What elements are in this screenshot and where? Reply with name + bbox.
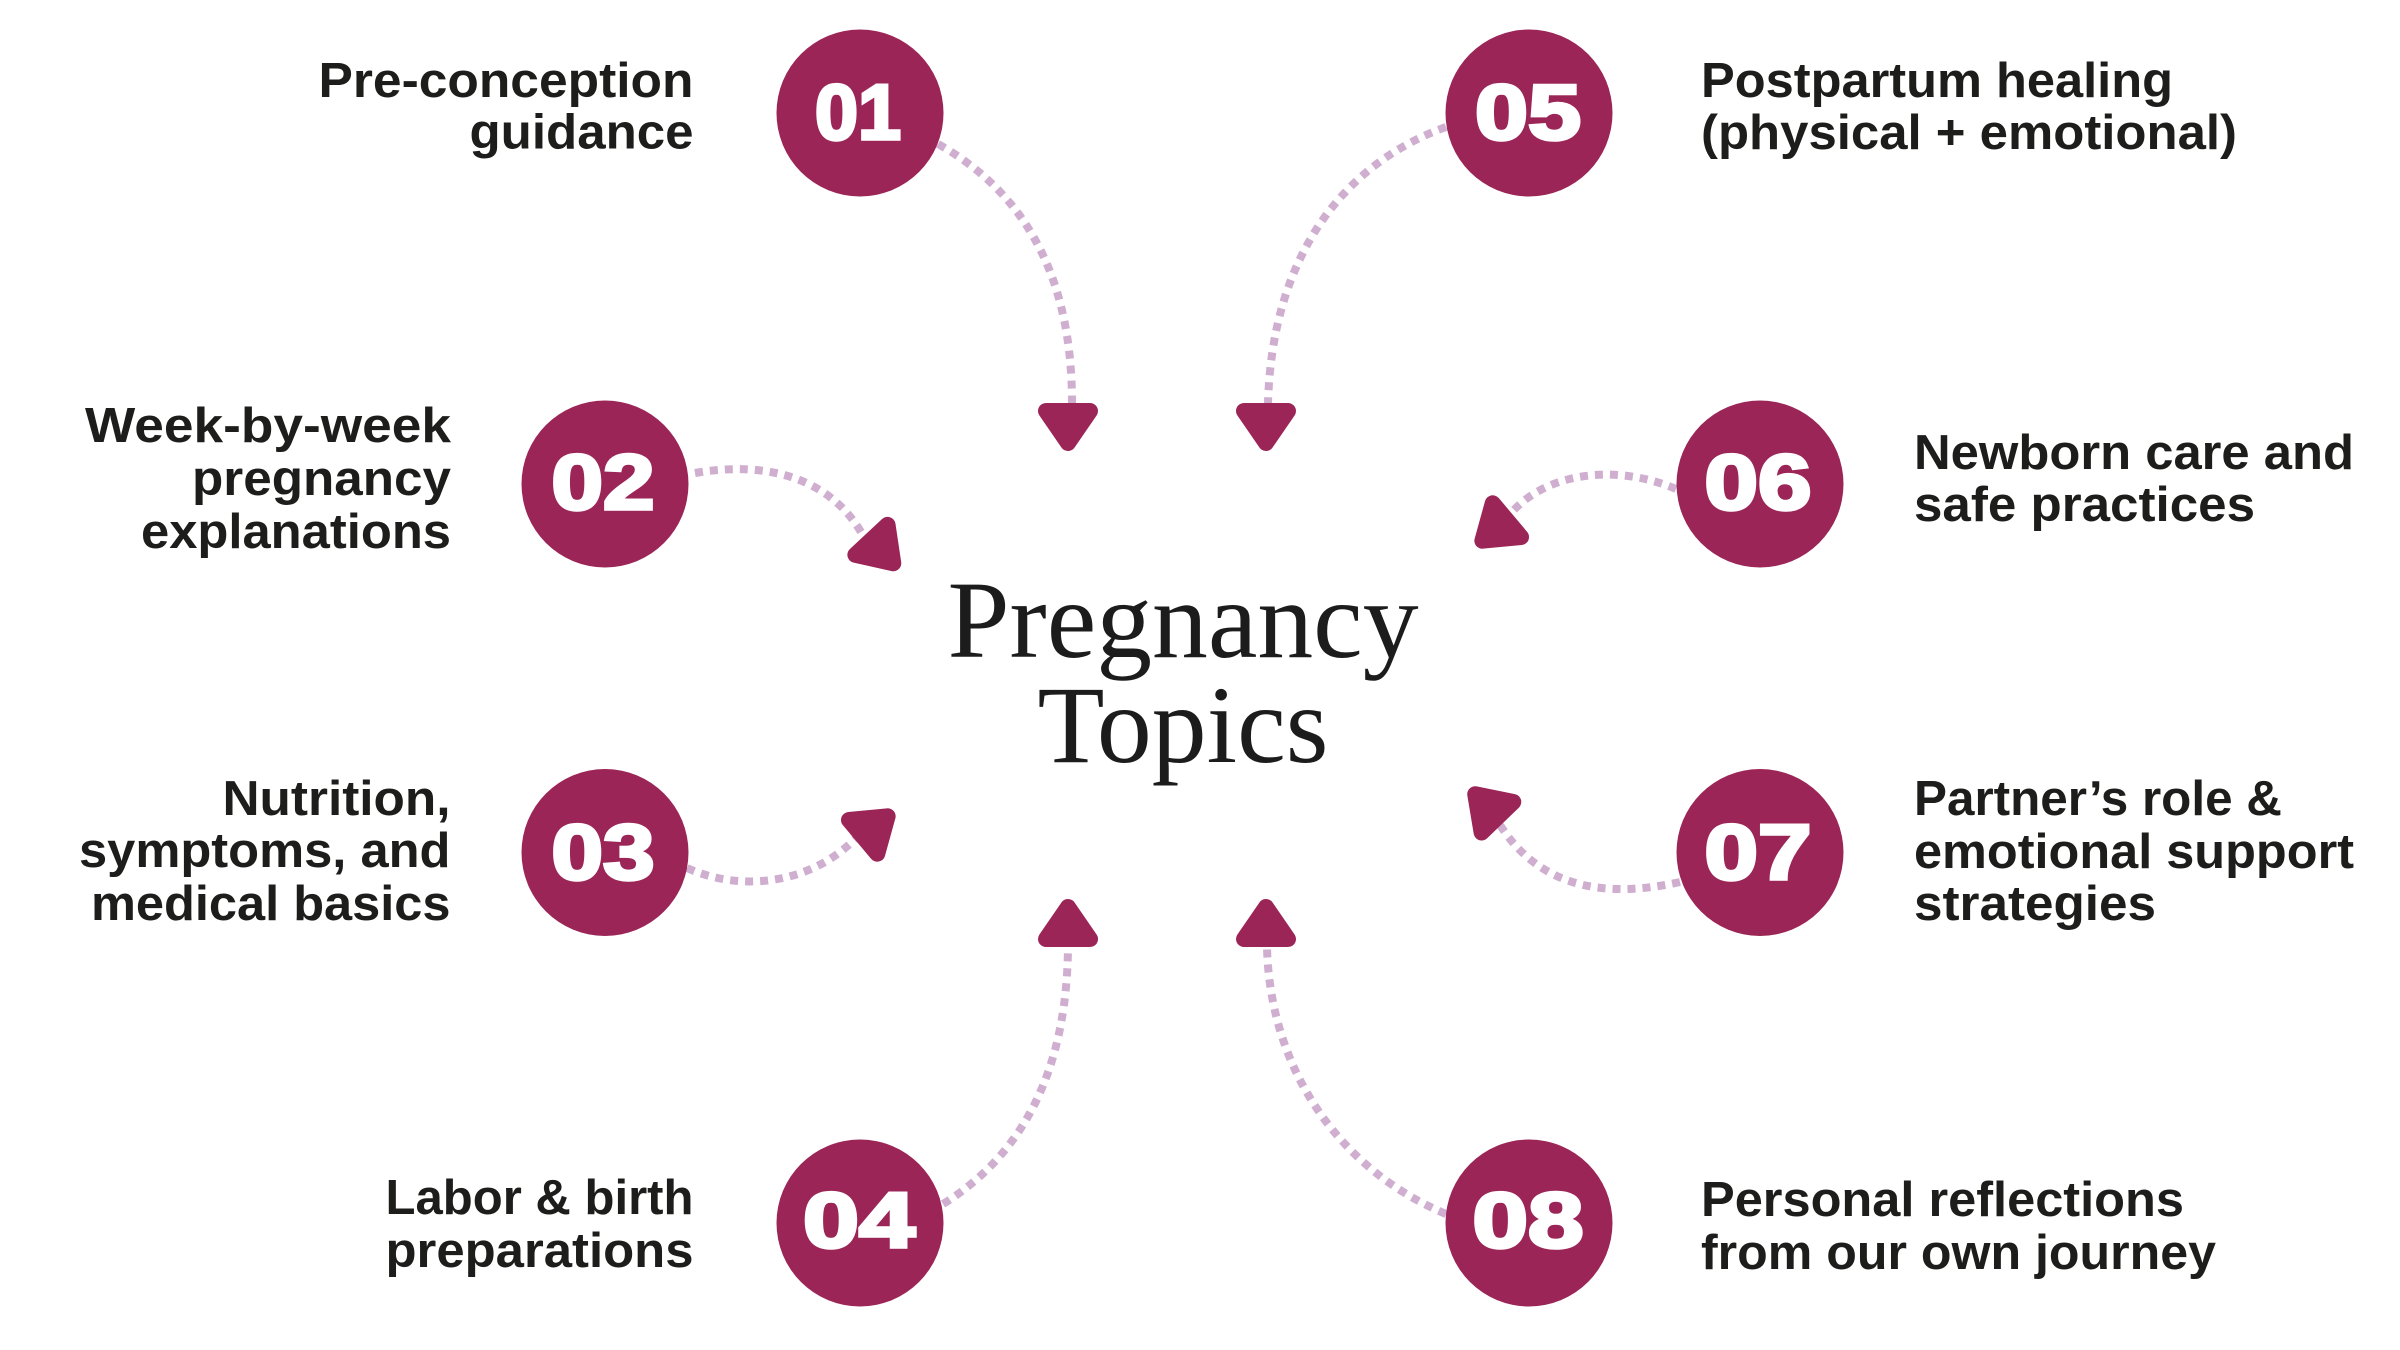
badge 03: 03	[552, 808, 654, 896]
label 08: Personal reflections	[1701, 1173, 2184, 1227]
label 04: preparations	[386, 1224, 694, 1278]
badge 02: 02	[552, 438, 654, 526]
badge 03	[522, 769, 688, 936]
label 06	[1914, 426, 2354, 532]
arrow: 05 to centre	[1244, 127, 1446, 443]
label 05	[1701, 54, 2237, 160]
badge 08: 08	[1472, 1176, 1584, 1264]
arrow: 02 to centre	[695, 469, 909, 578]
label 07	[1914, 772, 2354, 931]
badge 08	[1446, 1140, 1612, 1306]
label 08	[1701, 1173, 2216, 1280]
label 03	[79, 772, 450, 931]
label 01	[318, 54, 694, 160]
label 02: explanations	[141, 505, 451, 559]
label 06: Newborn care and	[1914, 426, 2354, 480]
arrow: 04 to centre	[943, 907, 1090, 1204]
badge 05	[1446, 30, 1612, 196]
badge 02	[522, 400, 688, 568]
topic 03	[79, 769, 688, 936]
arrow: 06 to centre	[1468, 475, 1676, 558]
label 07: emotional support	[1914, 825, 2354, 879]
badge 04	[776, 1140, 944, 1306]
badge 07: 07	[1704, 808, 1812, 896]
badge 06	[1676, 400, 1844, 568]
topic 08	[1446, 1140, 2216, 1306]
label 08: from our own journey	[1701, 1226, 2216, 1280]
arrow: 08 to centre	[1244, 907, 1446, 1214]
arrow: 03 to centre	[687, 799, 902, 881]
badge 01: 01	[815, 68, 901, 156]
badge 07	[1676, 769, 1844, 936]
label 01: Pre-conception	[318, 54, 694, 108]
topic 02	[85, 399, 688, 568]
label 04: Labor & birth	[386, 1171, 694, 1225]
label 03: medical basics	[91, 877, 450, 931]
topic 06	[1676, 400, 2354, 568]
badge 04: 04	[803, 1176, 915, 1264]
arrow: 01 to centre	[938, 144, 1090, 443]
topic 07	[1676, 769, 2354, 936]
label 05: (physical + emotional)	[1701, 106, 2237, 160]
label 02: Week-by-week	[85, 399, 452, 453]
title	[948, 559, 1418, 786]
topic 01	[318, 30, 944, 196]
label 01: guidance	[470, 106, 694, 160]
label 04	[386, 1171, 694, 1278]
badge 01	[776, 30, 944, 196]
topic 04	[386, 1140, 944, 1306]
title: Pregnancy	[948, 559, 1418, 681]
label 03: symptoms, and	[79, 824, 450, 878]
badge 06: 06	[1704, 438, 1812, 526]
arrow: 07 to centre	[1459, 779, 1680, 889]
label 06: safe practices	[1914, 478, 2255, 532]
label 02	[85, 399, 452, 559]
badge 05: 05	[1475, 68, 1581, 156]
label 03: Nutrition,	[222, 772, 450, 826]
title: Topics	[1038, 664, 1328, 786]
label 07: Partner’s role &	[1914, 772, 2282, 826]
topic 05	[1446, 30, 2237, 196]
label 02: pregnancy	[192, 452, 451, 506]
label 07: strategies	[1914, 877, 2156, 931]
label 05: Postpartum healing	[1701, 54, 2173, 108]
